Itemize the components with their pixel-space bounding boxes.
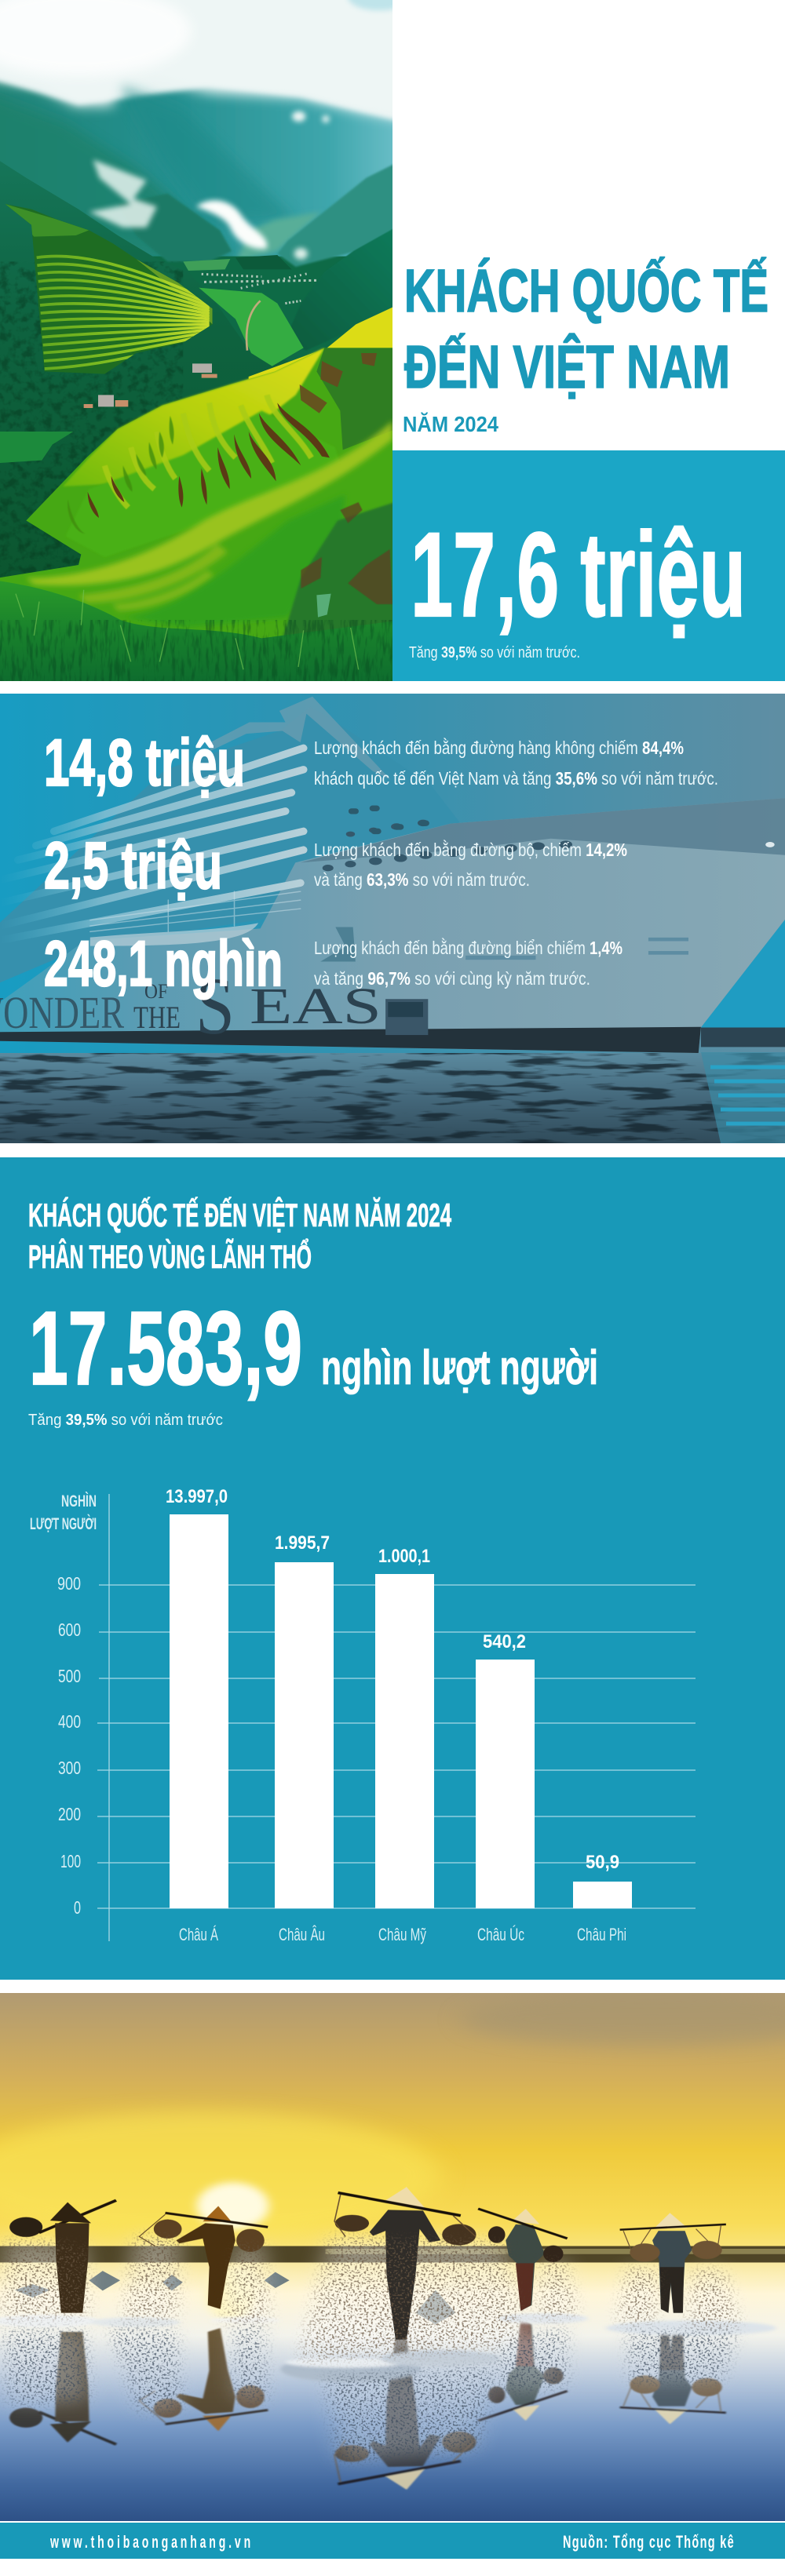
ridged furrows [104, 395, 312, 508]
ship name lettering [0, 979, 377, 1034]
bar chart [30, 1486, 696, 1944]
y axis title: LƯỢT NGƯỜI [30, 1514, 97, 1533]
left forested slopes [0, 162, 289, 578]
ship name lettering: OF [144, 980, 168, 1003]
stat: road arrivals: và tăng 63,3% so với năm trước. [314, 869, 530, 890]
bar: Châu Úc: 540,2 [483, 1631, 526, 1652]
bar: Châu Âu [275, 1532, 334, 1944]
bar: Châu Phi: Châu Phi [577, 1925, 626, 1944]
y axis labels: 400 [58, 1711, 81, 1732]
water [0, 1052, 785, 1143]
hillside villages [84, 363, 217, 408]
stat: air arrivals: Lượng khách đến bằng đường hàng không chiếm 84,4% [314, 738, 684, 758]
section heading: PHÂN THEO VÙNG LÃNH THỔ [28, 1237, 312, 1275]
panel: arrivals by transport mode over cruise ship photo [0, 694, 785, 1143]
y axis labels: 100 [60, 1851, 81, 1871]
yellow grass ribbons [26, 421, 392, 610]
stat: sea arrivals [45, 937, 622, 1000]
title [403, 257, 769, 436]
y axis labels [57, 1573, 81, 1918]
y axis labels: 900 [57, 1573, 81, 1594]
stat: road arrivals [45, 838, 626, 901]
photo: salt workers at sunrise [0, 1992, 785, 2523]
bar: Châu Phi [573, 1852, 632, 1944]
bar: Châu Âu: 1.995,7 [275, 1532, 330, 1554]
stat: sea arrivals: 248,1 nghìn [44, 928, 283, 1000]
section heading [28, 1196, 451, 1275]
bar: Châu Mỹ [375, 1546, 434, 1944]
salt piles [15, 2271, 455, 2324]
terraced field [5, 204, 212, 373]
water [0, 2262, 785, 2523]
growth note: Tăng 39,5% so với năm trước. [409, 644, 580, 661]
stat: air arrivals [46, 734, 717, 799]
foreground grass [0, 581, 403, 688]
valley floor [199, 288, 304, 366]
salt spray cloud [5, 2236, 739, 2461]
total figure: 17.583,9 [29, 1291, 302, 1407]
panel: arrivals by region [0, 1157, 785, 1980]
ship name lettering: THE [133, 1000, 181, 1035]
y axis labels: 500 [58, 1666, 81, 1686]
valley village [202, 273, 319, 304]
total figure: nghìn lượt người [321, 1341, 598, 1395]
bar: Châu Á: 13.997,0 [166, 1486, 228, 1507]
y axis labels: 200 [58, 1804, 81, 1824]
bar: Châu Á: Châu Á [179, 1925, 218, 1944]
stat: air arrivals: khách quốc tế đến Việt Nam và tăng 35,6% so với năm trước. [314, 768, 718, 789]
mist wisps [89, 111, 330, 260]
bar: Châu Phi: 50,9 [586, 1852, 619, 1873]
y axis title: NGHÌN [61, 1492, 97, 1510]
ship name lettering: EAS [250, 978, 382, 1035]
photo: rice terraces and mountain valley [0, 0, 418, 693]
stat: sea arrivals: Lượng khách đến bằng đường biển chiếm 1,4% [314, 938, 623, 958]
worker 4 [478, 2209, 568, 2311]
bar: Châu Mỹ: 1.000,1 [378, 1546, 430, 1567]
panel: teal headline number box [392, 450, 785, 681]
title: NĂM 2024 [403, 412, 498, 436]
y axis labels: 600 [58, 1620, 81, 1640]
horizon [0, 2246, 785, 2263]
reflections [9, 2319, 726, 2490]
footer band [0, 2523, 785, 2559]
section heading: KHÁCH QUỐC TẾ ĐẾN VIỆT NAM NĂM 2024 [28, 1196, 451, 1233]
bar: Châu Âu: Châu Âu [279, 1925, 325, 1944]
photo: cruise ship in teal duotone [0, 697, 785, 1143]
ship name lettering: S [195, 961, 235, 1051]
growth note: Tăng 39,5% so với năm trước [28, 1412, 223, 1429]
bar: Châu Úc: Châu Úc [477, 1925, 524, 1944]
y axis labels: 300 [58, 1758, 81, 1778]
stat: road arrivals: 2,5 triệu [44, 829, 222, 902]
worker 5 [620, 2213, 726, 2313]
worker 2 [139, 2206, 268, 2309]
right-side vegetation [300, 348, 403, 450]
y axis labels: 0 [74, 1897, 81, 1918]
salt mounds [0, 2313, 776, 2382]
bar: Châu Á [166, 1486, 228, 1944]
superstructure decks [0, 697, 426, 946]
stat: air arrivals: 14,8 triệu [44, 726, 245, 800]
foreground hill [0, 308, 403, 688]
salt speckle [5, 2236, 739, 2461]
stat: sea arrivals: và tăng 96,7% so với cùng kỳ năm trước. [314, 968, 590, 989]
worker 1 [9, 2200, 116, 2313]
bar: Châu Mỹ: Châu Mỹ [378, 1925, 426, 1944]
website: www.thoibaonganhang.vn [49, 2532, 254, 2552]
worker 3 [334, 2187, 476, 2340]
bar: Châu Úc [476, 1631, 535, 1944]
stat: road arrivals: Lượng khách đến bằng đường bộ, chiếm 14,2% [314, 840, 627, 860]
y axis title [30, 1492, 97, 1533]
